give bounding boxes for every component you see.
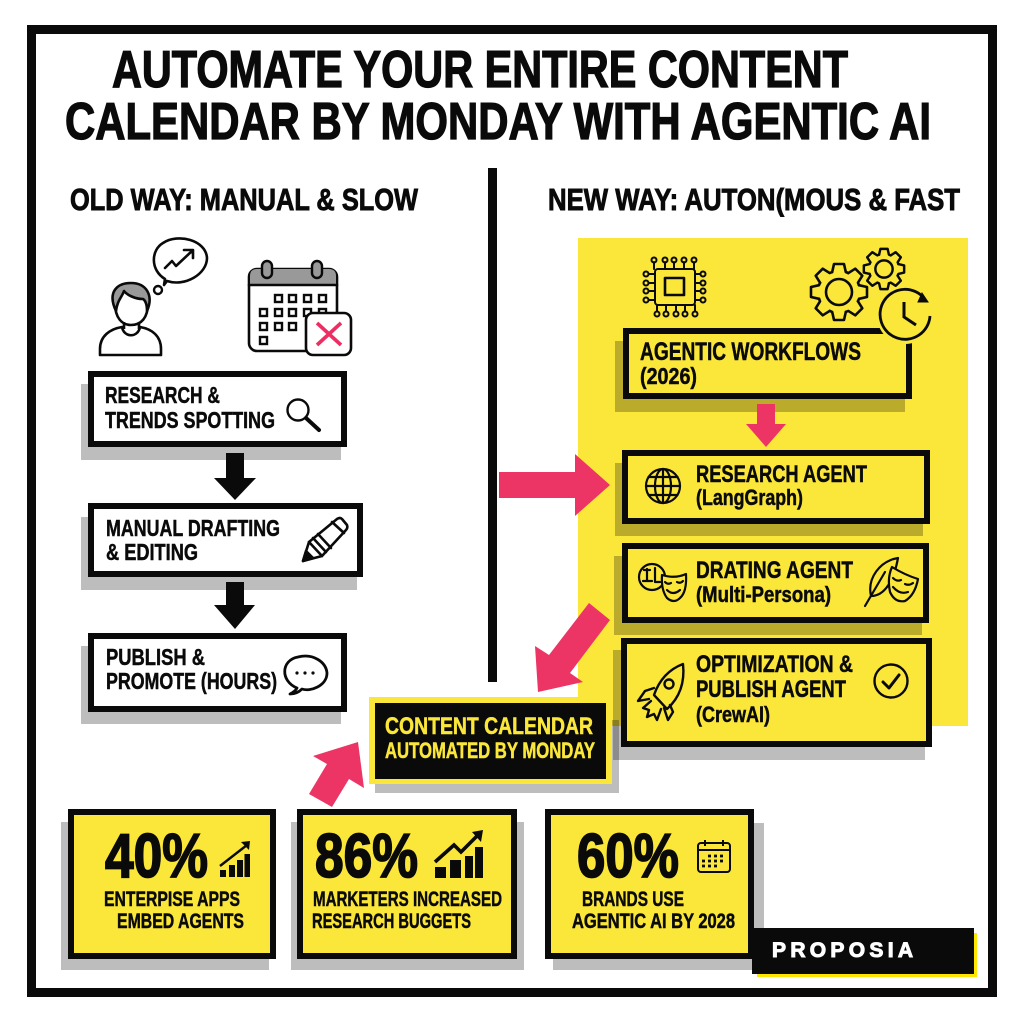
box: research and trends spotting: TRENDS SPOTTING (105, 407, 275, 433)
stat card: 86 percent: 86% (315, 822, 418, 891)
stat card: 60 percent: BRANDS USE (582, 888, 684, 911)
icon: microchip (644, 258, 706, 316)
box: optimization and publish agent: (CrewAI) (696, 702, 770, 727)
box: manual drafting and editing: MANUAL DRAFTING (106, 515, 280, 541)
icon: person thinking about trends (100, 238, 207, 355)
box: drafting agent (614, 546, 926, 635)
title (65, 41, 931, 151)
icon: calendar with cross (249, 261, 351, 355)
arrow: step one to two (214, 453, 256, 500)
icon: small bar chart with arrow (220, 841, 250, 877)
icon: clock (877, 288, 933, 344)
arrow: stats to content calendar (309, 742, 364, 807)
callout: content calendar automated by monday: CONTENT CALENDAR (385, 713, 593, 740)
box: agentic workflows: AGENTIC WORKFLOWS (640, 338, 861, 366)
stat card: 86 percent (291, 812, 524, 970)
box: agentic workflows (615, 331, 909, 412)
box: drafting agent: (Multi-Persona) (696, 582, 831, 607)
title: AUTOMATE YOUR ENTIRE CONTENT (112, 41, 848, 99)
icon: magnifier (288, 400, 319, 430)
stat card: 60 percent (548, 812, 764, 970)
panel: new way yellow background (578, 238, 968, 726)
icon: rocket (638, 664, 683, 720)
box: publish and promote (81, 636, 344, 724)
icon: globe and mask (639, 564, 686, 601)
box: optimization and publish agent (613, 641, 929, 760)
stat card: 40 percent (61, 812, 273, 970)
icon: small calendar (698, 840, 730, 872)
box: publish and promote: PUBLISH & (106, 644, 205, 670)
icon: speech bubble (285, 656, 327, 694)
stat card: 86 percent: MARKETERS INCREASED (313, 888, 502, 911)
center divider (488, 168, 497, 682)
heading: old way: OLD WAY: MANUAL & SLOW (70, 182, 419, 217)
box: research agent (615, 453, 927, 536)
icon: small gear (864, 249, 904, 289)
icon: feather and mask (865, 558, 918, 606)
stat card: 40 percent: EMBED AGENTS (117, 910, 244, 933)
icon: large gear (811, 264, 867, 320)
box: publish and promote: PROMOTE (HOURS) (106, 668, 277, 694)
logo: proposia (752, 928, 977, 977)
box: manual drafting and editing: & EDITING (106, 539, 198, 565)
arrow: old way to agents (499, 454, 610, 516)
box: optimization and publish agent: PUBLISH AGENT (696, 676, 846, 703)
box: research and trends spotting (81, 374, 344, 460)
arrow: workflows to research agent (746, 404, 786, 447)
stat card: 60 percent: AGENTIC AI BY 2028 (572, 910, 735, 933)
callout: content calendar automated by monday: AUTOMATED BY MONDAY (385, 738, 595, 763)
icon: pencil (303, 518, 347, 561)
stat card: 40 percent: ENTERPISE APPS (104, 888, 240, 911)
stat card: 60 percent: 60% (577, 822, 679, 891)
box: drafting agent: DRATING AGENT (696, 557, 853, 584)
arrow: step two to three (214, 582, 255, 629)
logo: proposia: PROPOSIA (772, 939, 913, 962)
icon: globe (646, 469, 680, 503)
box: research agent: RESEARCH AGENT (696, 461, 867, 488)
box: optimization and publish agent: OPTIMIZATION & (696, 651, 853, 678)
arrow: agents to content calendar (535, 603, 610, 692)
stat card: 40 percent: 40% (105, 822, 208, 891)
box: research and trends spotting: RESEARCH & (105, 382, 220, 408)
box: agentic workflows: (2026) (640, 363, 697, 389)
callout: content calendar automated by monday (369, 697, 619, 793)
icon: check circle (874, 664, 908, 698)
box: research agent: (LangGraph) (696, 485, 803, 510)
stat card: 86 percent: RESEARCH BUGGETS (312, 910, 471, 933)
box: manual drafting and editing (81, 506, 360, 590)
icon: bar chart with arrow (435, 830, 483, 878)
